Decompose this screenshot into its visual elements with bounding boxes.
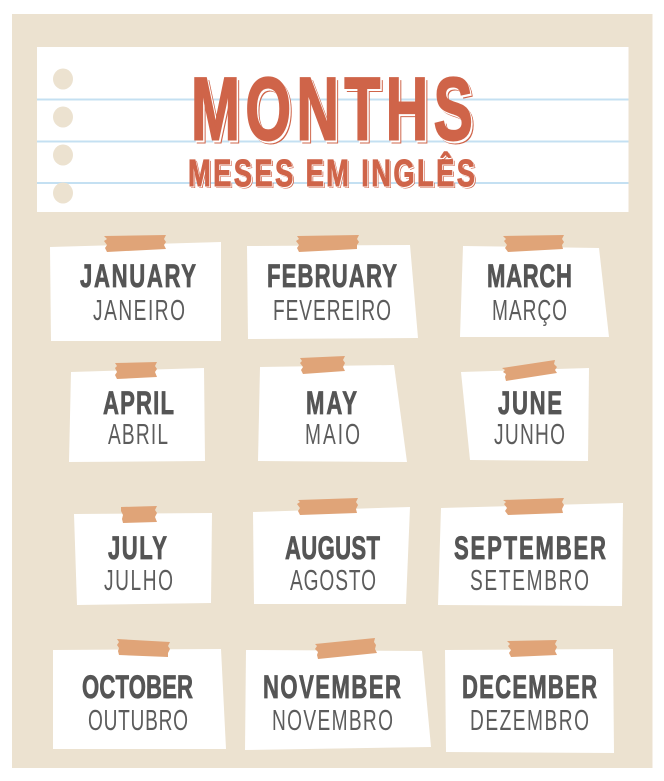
panel: June: JUNHO (494, 419, 565, 451)
panel: May (258, 356, 407, 462)
panel: February: FEBRUARY (267, 258, 397, 294)
panel: notebook paper header (37, 47, 628, 212)
panel: August: AUGUST (285, 530, 380, 566)
panel: February (247, 235, 418, 339)
panel: July: JULY (108, 530, 167, 566)
panel: July: JULHO (104, 565, 173, 597)
panel: March: MARÇO (492, 295, 567, 327)
panel: September (438, 498, 623, 606)
panel: April: ABRIL (108, 419, 168, 451)
panel: December: DECEMBER (462, 669, 597, 705)
panel: April (69, 362, 205, 462)
subtitle: MESES EM INGLÊS (188, 152, 475, 195)
panel: January (50, 235, 221, 341)
panel: March: MARCH (487, 258, 572, 294)
panel: December: DEZEMBRO (470, 705, 589, 737)
panel: February: FEVEREIRO (273, 295, 391, 327)
panel: November: NOVEMBER (263, 669, 401, 705)
panel: November (245, 638, 431, 750)
panel: January: JANEIRO (93, 295, 185, 327)
title: MONTHS (191, 59, 473, 158)
panel: September: SETEMBRO (470, 565, 589, 597)
panel: June (461, 360, 589, 461)
panel: September: SEPTEMBER (454, 530, 606, 566)
panel: October (53, 639, 226, 749)
panel: May: MAY (306, 385, 357, 421)
panel: January: JANUARY (80, 258, 196, 294)
title: MONTHS (192, 61, 474, 160)
panel: December (445, 640, 614, 753)
subtitle: MESES EM INGLÊS (190, 153, 476, 197)
panel: October: OCTOBER (82, 669, 193, 705)
panel: August: AGOSTO (290, 565, 376, 597)
panel: October: OUTUBRO (88, 705, 188, 737)
panel: June: JUNE (498, 385, 562, 421)
panel: April: APRIL (103, 385, 174, 421)
panel: March (460, 235, 609, 337)
panel: July (74, 506, 212, 605)
panel: November: NOVEMBRO (272, 705, 393, 737)
panel: August (253, 498, 410, 604)
icon: punched holes (53, 68, 73, 204)
subtitle: MESES EM INGLÊS (189, 152, 476, 196)
panel: May: MAIO (305, 419, 360, 451)
title: MONTHS (194, 62, 475, 161)
